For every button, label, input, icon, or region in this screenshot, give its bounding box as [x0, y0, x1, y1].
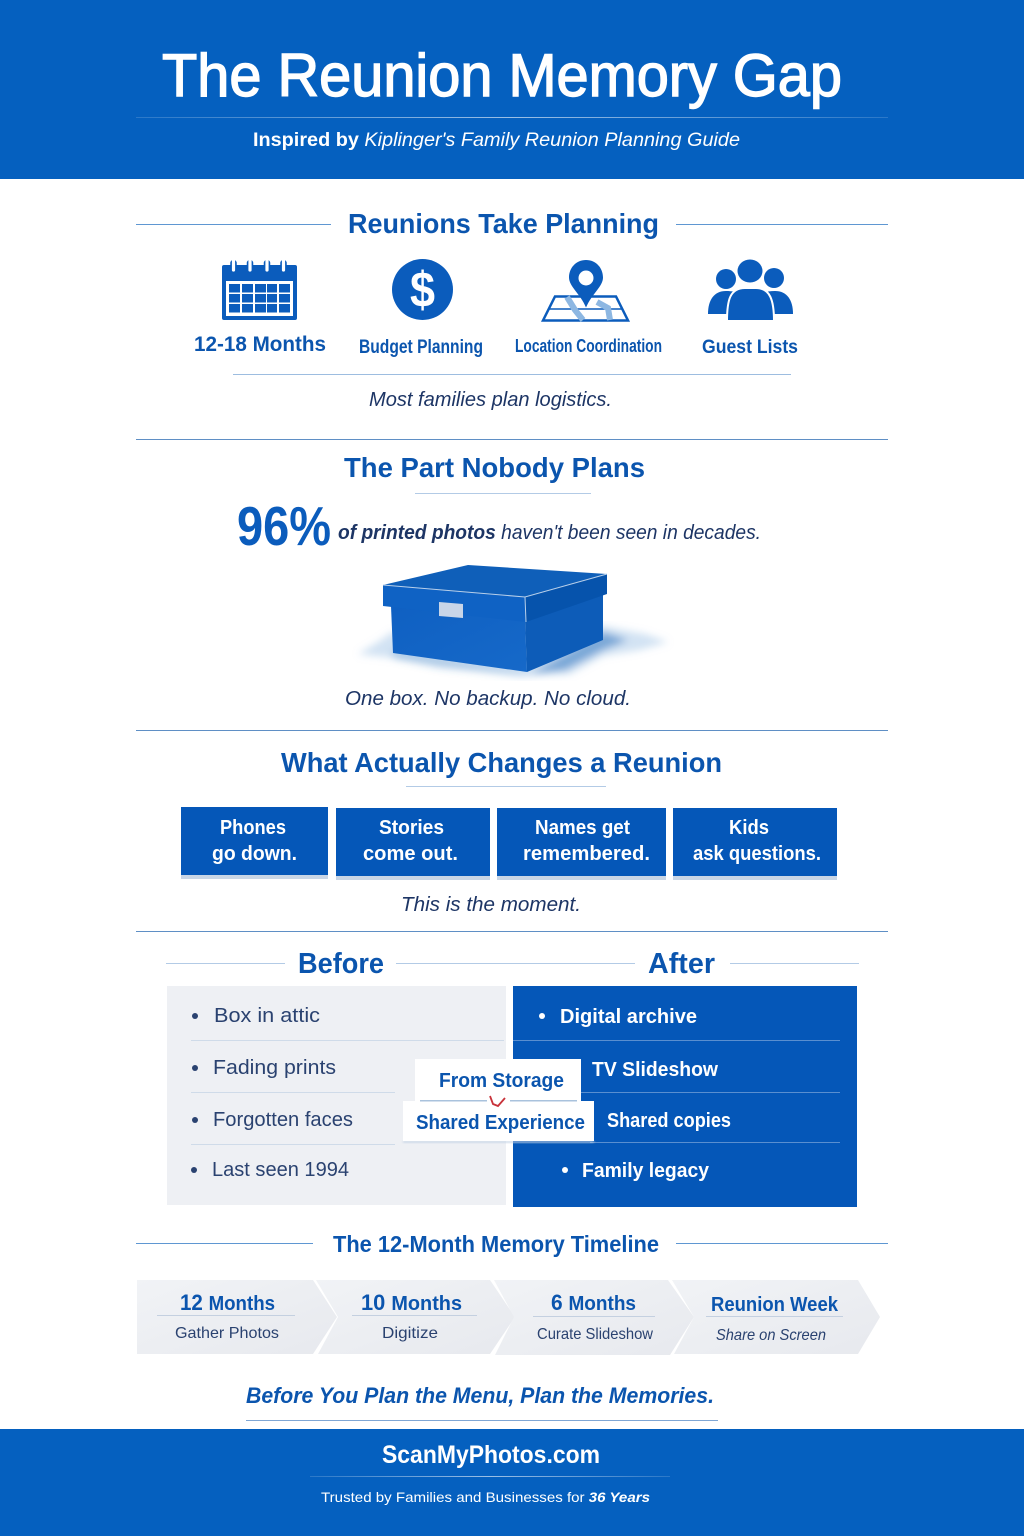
card: names get remembered [497, 808, 666, 880]
card: phones go down [181, 807, 328, 879]
panel: before list [167, 986, 506, 1205]
text: this is the moment: This is the moment. [401, 894, 581, 916]
label: 12-18 months: 12-18 Months [194, 333, 326, 356]
callout: from storage to shared experience: From Storage [439, 1070, 564, 1092]
arrow: reunion week [672, 1280, 880, 1354]
panel: after list: Family legacy [582, 1160, 710, 1182]
card: stories come out: Stories [379, 817, 444, 839]
footer: website: ScanMyPhotos.com [382, 1441, 600, 1469]
panel: before list: Box in attic [214, 1005, 320, 1027]
panel: after list: Shared copies [607, 1110, 731, 1132]
panel: after list: Digital archive [560, 1006, 697, 1028]
subtitle: Inspired by Kiplinger's Family Reunion Planning Guide [253, 130, 740, 151]
panel: after list: TV Slideshow [592, 1059, 718, 1081]
card: names get remembered: Names get [535, 817, 630, 839]
arrow: 10 months [316, 1280, 515, 1354]
text: stat description: of printed photos haven't been seen in decades. [338, 522, 761, 544]
label: location coordination: Location Coordination [515, 336, 662, 356]
arrow: 12 months: Gather Photos [175, 1325, 279, 1342]
heading: before: Before [298, 948, 384, 980]
panel: 12-month memory timeline [136, 1231, 888, 1355]
arrow: 12 months [137, 1280, 337, 1354]
card: phones go down: go down. [212, 843, 297, 865]
panel: before list: Fading prints [213, 1057, 336, 1079]
heading: after: After [648, 948, 715, 980]
icon: map pin [543, 260, 628, 320]
panel: before list: Forgotten faces [213, 1109, 353, 1131]
tagline: Before You Plan the Menu, Plan the Memories. [246, 1383, 714, 1408]
heading: reunions take planning: Reunions Take Planning [348, 208, 659, 239]
callout: from storage to shared experience [403, 1059, 594, 1143]
stat: 96 percent: 96% [237, 495, 331, 557]
title: The Reunion Memory Gap [162, 42, 842, 109]
card: kids ask questions: Kids [729, 817, 769, 839]
arrow: 6 months [494, 1280, 694, 1355]
panel: the part nobody plans [237, 452, 761, 710]
text: most families: Most families plan logistics. [369, 389, 612, 411]
arrow: reunion week: Reunion Week [711, 1294, 839, 1316]
card: kids ask questions: ask questions. [693, 843, 821, 865]
label: budget planning: Budget Planning [359, 337, 483, 358]
panel: what changes a reunion [181, 747, 837, 916]
icon: dollar [392, 259, 453, 320]
icon: people [708, 260, 793, 321]
card: phones go down: Phones [220, 817, 286, 839]
heading: what actually changes: What Actually Changes a Reunion [281, 747, 722, 778]
card: kids ask questions [673, 808, 837, 880]
icon: photo box [358, 565, 668, 676]
header banner [0, 0, 1024, 179]
footer banner [0, 1429, 1024, 1536]
card: names get remembered: remembered. [523, 843, 650, 865]
panel: before and after [166, 948, 859, 1207]
icon: dollar: $ [410, 262, 435, 318]
panel: reunions take planning [136, 208, 888, 411]
text: one box: One box. No backup. No cloud. [345, 688, 631, 710]
callout: from storage to shared experience: Shared Experience [416, 1112, 585, 1134]
arrow: 10 months: Digitize [382, 1325, 438, 1342]
arrow: reunion week: Share on Screen [716, 1327, 826, 1344]
panel: after list [513, 986, 857, 1207]
panel: before list: Last seen 1994 [212, 1159, 349, 1181]
icon: calendar [222, 260, 297, 320]
card: stories come out: come out. [363, 843, 458, 865]
heading: the part nobody plans: The Part Nobody Plans [344, 452, 645, 483]
arrow: 6 months: Curate Slideshow [537, 1326, 653, 1343]
label: guest lists: Guest Lists [702, 337, 798, 358]
footer: trust line: Trusted by Families and Businesses for 36 Years [321, 1489, 650, 1505]
heading: timeline: The 12-Month Memory Timeline [333, 1231, 659, 1257]
arrow: 6 months: 6 Months [551, 1290, 636, 1315]
arrow: 12 months: 12 Months [180, 1290, 275, 1315]
card: stories come out [336, 808, 490, 880]
arrow: 10 months: 10 Months [361, 1290, 462, 1315]
